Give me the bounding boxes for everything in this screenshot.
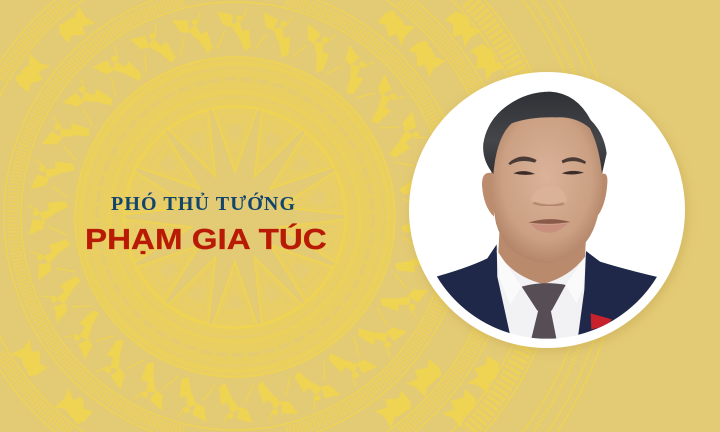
person bbox=[430, 92, 663, 347]
heading: title: PHÓ THỦ TƯỚNG bbox=[111, 191, 295, 215]
suit jacket right bbox=[578, 251, 657, 335]
animals: third band bbox=[440, 6, 507, 429]
inner patterned ring bbox=[75, 57, 395, 377]
collar bbox=[497, 250, 585, 305]
portrait shadow bbox=[410, 74, 688, 352]
portrait bbox=[409, 72, 688, 352]
eyebrows bbox=[508, 157, 586, 165]
face bbox=[491, 117, 602, 254]
portrait white circle bbox=[409, 72, 685, 348]
hair bbox=[483, 92, 607, 174]
heading: name: PHẠM GIA TÚC bbox=[85, 222, 327, 256]
star triangles bbox=[123, 107, 347, 327]
suit jacket left bbox=[436, 244, 510, 334]
party pin bbox=[591, 313, 612, 329]
birds and figures: first band bbox=[27, 9, 443, 425]
shirt bbox=[497, 247, 586, 338]
ears bbox=[482, 173, 494, 217]
neck bbox=[498, 232, 586, 284]
animals: second band bbox=[10, 5, 447, 429]
eyes bbox=[513, 171, 584, 175]
tie bbox=[522, 283, 566, 340]
mouth bbox=[528, 219, 571, 224]
nose bbox=[561, 197, 566, 202]
